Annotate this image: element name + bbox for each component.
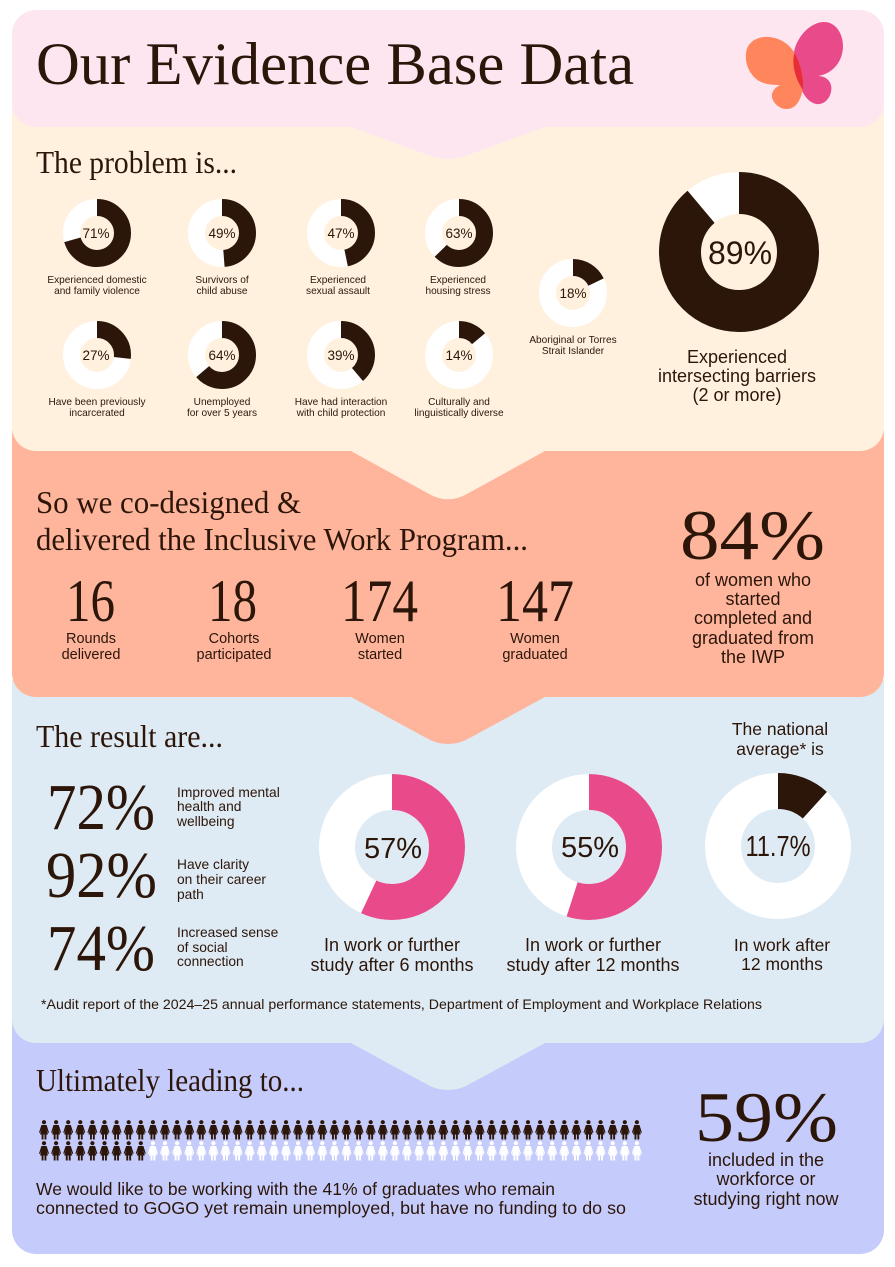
stat: 59 percent [693,1079,840,1209]
stat: 147 women graduated: Women [510,631,560,647]
donut chart: 47 percent: Experienced [310,275,366,286]
donut chart: national average 11.7 percent: 12 months [741,954,823,974]
donut chart: 64 percent: 64% [208,348,236,363]
stat: 72 percent mental health: health and [177,799,241,814]
stat: 59 percent: included in the [708,1150,824,1170]
text: funding statement [36,1179,626,1218]
donut chart: 63 percent: Experienced [430,275,486,286]
stat: 92 percent career clarity [46,839,266,912]
donut chart: 71 percent [47,208,147,297]
text: funding statement: We would like to be working with the 41% of graduates who remain [36,1179,555,1199]
stat: 92 percent career clarity: on their career [177,872,266,887]
donut chart: 47 percent: sexual assault [306,286,370,297]
stat: 72 percent mental health: wellbeing [176,814,235,829]
stat: 92 percent career clarity: path [177,887,204,902]
donut chart: 71 percent: 71% [82,226,110,241]
donut chart: national average 11.7 percent: average* is [736,739,824,759]
donut chart: 64 percent: for over 5 years [187,408,257,419]
donut chart: 49 percent: Survivors of [195,275,249,286]
text: funding statement: connected to GOGO yet remain unemployed, but have no funding to do so [36,1198,626,1218]
donut chart: 18 percent: Strait Islander [542,346,605,357]
stat: 84 percent completed: 84% [680,497,825,575]
stat: 18 cohorts participated [197,568,271,663]
donut chart: 27 percent: 27% [82,348,110,363]
donut chart: 55 percent after 12 months: study after 12 months [506,955,680,975]
stat: 16 rounds delivered: delivered [62,647,120,663]
stat: 84 percent completed: started [725,589,781,609]
donut chart: 14 percent: linguistically diverse [414,408,504,419]
panel: salmon program section [12,430,884,744]
stat: 84 percent completed: the IWP [721,647,785,667]
heading: ultimately leading to: Ultimately leading to... [36,1062,304,1098]
donut chart: 63 percent [425,208,491,297]
donut chart: 63 percent: housing stress [425,286,491,297]
stat: 84 percent completed [680,497,825,667]
title: Our Evidence Base Data [36,31,634,97]
donut chart: 57 percent after 6 months: study after 6 months [310,955,474,975]
donut chart: national average 11.7 percent: 11.7% [746,831,810,863]
donut chart: national average 11.7 percent [723,719,833,974]
heading: the result are: The result are... [36,718,223,754]
stat: 59 percent: 59% [695,1079,838,1157]
donut chart: 18 percent: Aboriginal or Torres [529,335,617,346]
stat: 18 cohorts participated: 18 [208,568,257,634]
stat: 74 percent social connection [47,912,279,985]
stat: 174 women started [341,568,418,663]
stat: 72 percent mental health: Improved mental [177,785,280,800]
donut chart: 57 percent after 6 months: In work or further [324,935,460,955]
donut chart: 27 percent: incarcerated [69,408,125,419]
donut chart: 57 percent after 6 months [310,792,474,975]
donut chart: 89 percent: 89% [708,235,772,271]
donut chart: 64 percent: Unemployed [194,397,250,408]
donut chart: 49 percent [195,208,249,297]
donut chart: 49 percent: child abuse [196,286,248,297]
heading: co-designed program: So we co-designed & [36,484,301,520]
stat: 74 percent social connection: connection [177,954,244,969]
donut chart: 39 percent: 39% [327,348,355,363]
stat: 72 percent mental health: 72% [47,771,155,844]
donut chart: 71 percent: Experienced domestic [47,275,147,286]
stat: 16 rounds delivered: 16 [66,568,115,634]
stat: 72 percent mental health [47,771,280,844]
stat: 84 percent completed: graduated from [692,628,814,648]
stat: 174 women started: Women [355,631,405,647]
donut chart: 47 percent [306,208,370,297]
stat: 147 women graduated: graduated [502,647,568,663]
donut chart: 14 percent: Culturally and [428,397,490,408]
stat: 74 percent social connection: 74% [47,912,155,985]
stat: 59 percent: studying right now [693,1189,840,1209]
panel: purple outcome section [12,1020,884,1254]
stat: 74 percent social connection: Increased sense [177,925,279,940]
donut chart: 57 percent after 6 months: 57% [364,833,422,865]
stat: 16 rounds delivered: Rounds [66,631,116,647]
pictogram: 59 of 100 people [39,1120,642,1160]
donut chart: 89 percent [658,193,816,405]
stat: 174 women started: 174 [341,568,418,634]
panel: pink title section [12,10,884,159]
stat: 74 percent social connection: of social [177,940,228,955]
donut chart: national average 11.7 percent: The national [732,719,828,739]
donut chart: 49 percent: 49% [208,226,236,241]
heading: co-designed program: delivered the Inclusive Work Program... [36,521,528,557]
stat: 174 women started: started [358,647,402,663]
stat: 16 rounds delivered [62,568,120,663]
donut chart: national average 11.7 percent: In work after [734,935,830,955]
donut chart: 47 percent: 47% [327,226,355,241]
donut chart: 39 percent: Have had interaction [295,397,387,408]
donut chart: 71 percent: and family violence [54,286,140,297]
donut chart: 27 percent: Have been previously [48,397,146,408]
stat: 84 percent completed: of women who [695,570,811,590]
donut chart: 55 percent after 12 months: 55% [561,832,619,864]
donut chart: 55 percent after 12 months: In work or further [525,935,661,955]
donut chart: 89 percent: (2 or more) [692,385,782,405]
donut chart: 18 percent [529,268,617,357]
donut chart: 14 percent [414,330,504,419]
donut chart: 55 percent after 12 months [506,792,680,975]
heading: the problem is: The problem is... [36,144,237,180]
stat: 59 percent: workforce or [715,1169,816,1189]
donut chart: 18 percent: 18% [559,286,587,301]
stat: 92 percent career clarity: 92% [46,839,157,912]
donut chart: 39 percent: with child protection [296,408,385,419]
stat: 18 cohorts participated: participated [197,647,271,663]
stat: 84 percent completed: completed and [694,608,812,628]
stat: 92 percent career clarity: Have clarity [177,857,249,872]
donut chart: 39 percent [295,330,387,419]
stat: 147 women graduated [496,568,574,663]
donut chart: 64 percent [187,330,257,419]
donut chart: 27 percent [48,330,146,419]
panel: blue results section [12,680,884,1090]
stat: 147 women graduated: 147 [496,568,574,634]
donut chart: 14 percent: 14% [445,348,473,363]
footnote: *Audit report of the 2024–25 annual performance statements, Department of Employment and Workplace Relations [41,996,762,1012]
icon: butterfly logo [746,22,843,109]
donut chart: 89 percent: intersecting barriers [658,366,816,386]
donut chart: 63 percent: 63% [445,226,473,241]
donut chart: 89 percent: Experienced [687,347,787,367]
stat: 18 cohorts participated: Cohorts [209,631,259,647]
heading: co-designed program [36,484,528,557]
panel: cream problem section [12,100,884,499]
